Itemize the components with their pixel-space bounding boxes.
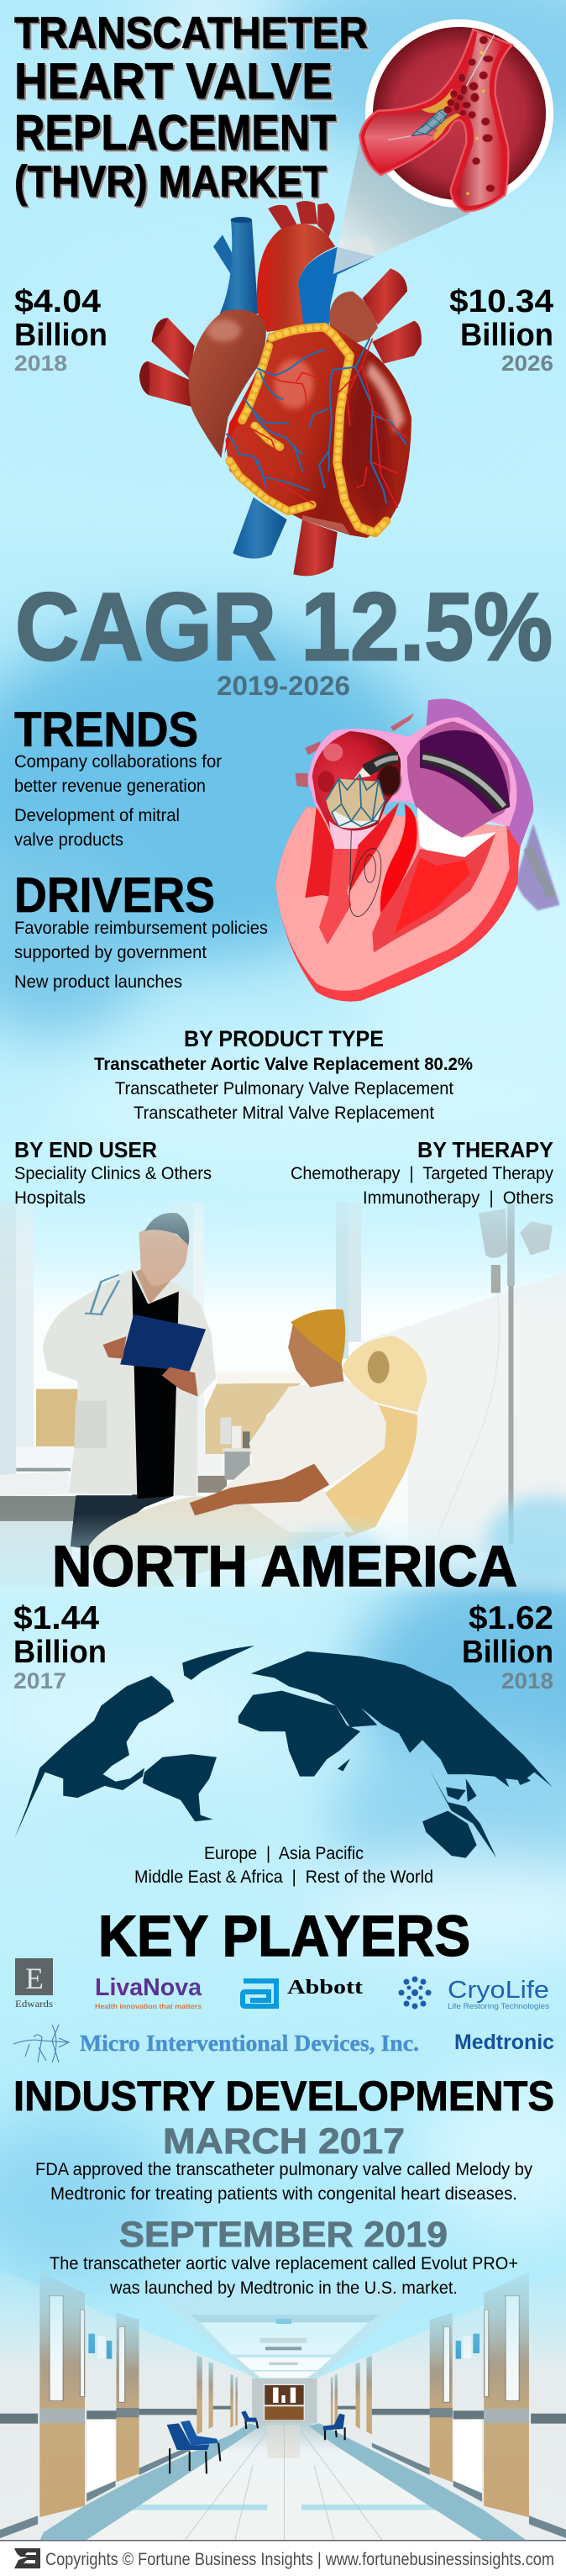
right wall <box>361 1272 566 1523</box>
outside view <box>36 1389 80 1446</box>
by therapy: Immunotherapy | Others <box>363 1188 553 1208</box>
descending tube <box>515 824 560 910</box>
stat: 2017 value: Billion <box>13 1635 107 1670</box>
doctor neck and head <box>135 1213 189 1304</box>
development: September 2019: was launched by Medtronic in the U.S. market. <box>109 2278 458 2298</box>
stat: 2026 value: $10.34 <box>449 284 553 319</box>
by therapy: BY THERAPY <box>417 1137 553 1162</box>
trends block: Development of mitral <box>14 806 180 825</box>
by end user: BY END USER <box>14 1137 157 1162</box>
icon: heart cross-section with valve <box>275 698 560 1002</box>
muscle face <box>275 807 510 991</box>
doctor coat <box>43 1269 216 1496</box>
stat: 2026 value <box>449 284 553 376</box>
bottles and table <box>220 1418 250 1480</box>
chairs <box>167 2410 345 2473</box>
right chamber <box>407 721 511 838</box>
left atrial appendage <box>329 292 378 345</box>
development: March 2017: Medtronic for treating patients with congenital heart diseases. <box>50 2184 517 2204</box>
right pulmonary veins <box>363 268 422 364</box>
inferior vena cava <box>233 498 287 559</box>
spotlight cone from heart to inset <box>333 126 470 275</box>
stent mesh <box>411 108 451 136</box>
lower white wall panels <box>86 2419 482 2492</box>
blanket <box>88 1496 343 1588</box>
doctor hands <box>103 1336 198 1397</box>
logo: CryoLife: Life Restoring Technologies <box>448 2002 550 2010</box>
vena cava and branch <box>213 217 258 313</box>
chair <box>325 1335 427 1538</box>
patient arm <box>190 1464 329 1515</box>
skirting boards <box>0 2443 566 2538</box>
fat deposits <box>229 327 386 533</box>
title: HEART VALVE <box>14 53 333 109</box>
footer <box>0 2540 566 2576</box>
world map <box>14 1646 553 1858</box>
development: September 2019: SEPTEMBER 2019 <box>119 2215 448 2255</box>
coronary arteries <box>238 339 406 507</box>
photo: hospital corridor <box>0 2269 566 2541</box>
development: March 2017: MARCH 2017 <box>163 2121 405 2162</box>
stat: 2026 value: Billion <box>460 318 553 353</box>
stat: 2018 regional value: Billion <box>462 1635 553 1670</box>
title <box>14 8 368 207</box>
by end user: Speciality Clinics & Others <box>14 1164 212 1183</box>
patient head <box>288 1322 343 1388</box>
stat: 2018 value: 2018 <box>14 350 67 376</box>
red atrial rim <box>224 370 263 454</box>
side branch sheen <box>364 105 459 170</box>
stat: 2017 value: $1.44 <box>13 1600 99 1636</box>
trends block: valve products <box>14 830 123 850</box>
right doors <box>331 2272 529 2517</box>
by therapy <box>291 1137 553 1208</box>
logo: Edwards: E <box>25 1962 44 1995</box>
CAGR period: 2019-2026 <box>217 671 350 701</box>
plaque specks <box>466 51 485 195</box>
end wall and doors <box>252 2378 317 2423</box>
stat: 2018 value: $4.04 <box>14 284 101 319</box>
logo: Edwards <box>15 1958 53 2010</box>
artery walls <box>359 29 512 212</box>
logo: archer emblem <box>13 2025 69 2062</box>
key players heading: KEY PLAYERS <box>98 1904 470 1968</box>
logo: Edwards: Edwards <box>15 1998 53 2010</box>
valve stent <box>326 775 385 829</box>
apex plate <box>302 515 350 535</box>
right wall <box>316 2269 566 2541</box>
wall signs <box>88 2334 480 2359</box>
patient hat <box>291 1309 345 1364</box>
photo: doctor with patient <box>0 1202 566 1597</box>
icon: Fortune Business Insights logo <box>14 2548 40 2568</box>
drivers block: supported by government <box>14 943 207 962</box>
stat: 2018 value <box>14 284 107 376</box>
plaque <box>422 88 453 113</box>
room wash <box>0 1202 566 1597</box>
pulmonary veins left <box>139 318 195 407</box>
window frames <box>0 1202 361 1477</box>
by product type: Transcatheter Mitral Valve Replacement <box>134 1104 434 1123</box>
development: September 2019: The transcatheter aortic valve replacement called Evolut PRO+ <box>50 2254 518 2273</box>
white lower chamber <box>417 807 495 868</box>
drivers block <box>14 868 268 992</box>
stat: 2026 value: 2026 <box>501 350 553 376</box>
catheters <box>365 765 376 771</box>
vessel stubs <box>296 713 414 788</box>
doctor shirt <box>132 1271 179 1499</box>
trends block: better revenue generation <box>14 777 206 796</box>
by end user: Hospitals <box>14 1188 86 1208</box>
right atrium <box>189 310 266 458</box>
floor <box>39 2423 527 2541</box>
logo: CryoLife: CryoLife <box>448 1977 549 2004</box>
title: (THVR) MARKET <box>14 157 327 207</box>
stat: 2017 value: 2017 <box>13 1668 66 1694</box>
stat: 2017 value <box>13 1600 107 1694</box>
by therapy: Chemotherapy | Targeted Therapy <box>291 1164 553 1183</box>
clipboard <box>120 1314 206 1372</box>
soft blue wash beside photo <box>286 1496 566 1580</box>
development: March 2017 <box>35 2121 532 2204</box>
by end user <box>14 1137 212 1208</box>
by product type: Transcatheter Pulmonary Valve Replacement <box>115 1079 453 1098</box>
chordae loops <box>343 830 387 919</box>
sweater <box>220 1380 386 1532</box>
other regions list: Middle East & Africa | Rest of the World <box>134 1867 433 1887</box>
title: REPLACEMENT <box>14 105 336 161</box>
logo: Medtronic: Medtronic <box>454 2031 554 2054</box>
translucent band <box>333 235 375 274</box>
logo: Abbott <box>243 1977 363 2006</box>
drivers block: New product launches <box>14 972 182 992</box>
aorta arch <box>257 224 335 332</box>
door windows <box>50 2296 519 2402</box>
inset: artery stent circle <box>359 19 553 212</box>
by product type: BY PRODUCT TYPE <box>184 1026 384 1051</box>
trends block: Company collaborations for <box>14 752 222 772</box>
stat: 2018 value: Billion <box>14 318 107 353</box>
left chamber <box>312 731 401 835</box>
pink ring <box>308 717 517 826</box>
sill and lower wall <box>0 1471 69 1496</box>
ventricle shading <box>275 359 405 524</box>
stat: 2018 regional value: $1.62 <box>469 1600 553 1636</box>
artery trunk sheen <box>456 32 504 206</box>
IV stand <box>438 1202 553 1544</box>
blood cells <box>443 36 495 192</box>
red underside <box>275 807 519 1002</box>
ceiling <box>148 2286 386 2378</box>
handrails <box>0 2406 566 2424</box>
trends block: TRENDS <box>14 703 198 757</box>
pale left lower chamber <box>329 821 384 849</box>
stethoscope <box>85 1275 119 1314</box>
region heading: NORTH AMERICA <box>52 1534 517 1599</box>
left doors <box>39 2272 238 2517</box>
other regions list <box>134 1844 433 1887</box>
guide wires <box>388 136 411 140</box>
doctor trousers <box>71 1494 173 1550</box>
coronary veins <box>227 339 406 503</box>
stat: 2018 regional value: 2018 <box>501 1668 553 1694</box>
papillary muscles <box>305 807 334 898</box>
descending vessel <box>293 519 338 576</box>
development: September 2019 <box>50 2215 518 2298</box>
ventricles <box>225 325 411 538</box>
icon: heart illustration <box>139 201 422 576</box>
stat: 2018 regional value <box>462 1600 553 1694</box>
by product type: Transcatheter Aortic Valve Replacement 80.2% <box>94 1055 473 1074</box>
logo: LivaNova: Health innovation that matters <box>95 2003 202 2010</box>
by product type <box>94 1026 473 1123</box>
logo: CryoLife <box>398 1977 550 2010</box>
trends block <box>14 703 222 850</box>
logo: LivaNova: LivaNova <box>95 1974 202 2001</box>
left wall <box>0 2269 258 2541</box>
drivers block: DRIVERS <box>14 868 215 923</box>
other regions list: Europe | Asia Pacific <box>204 1844 364 1863</box>
logo: Abbott: Abbott <box>287 1977 363 1999</box>
logo: Micro Interventional Devices: Micro Interventional Devices, Inc. <box>80 2031 419 2056</box>
purple exterior <box>426 698 533 885</box>
drivers block: Favorable reimbursement policies <box>14 919 268 938</box>
title: TRANSCATHETER <box>14 8 368 58</box>
development: March 2017: FDA approved the transcatheter pulmonary valve called Melody by <box>35 2160 532 2179</box>
pulmonary artery <box>298 247 375 326</box>
aortic branches <box>268 201 335 237</box>
